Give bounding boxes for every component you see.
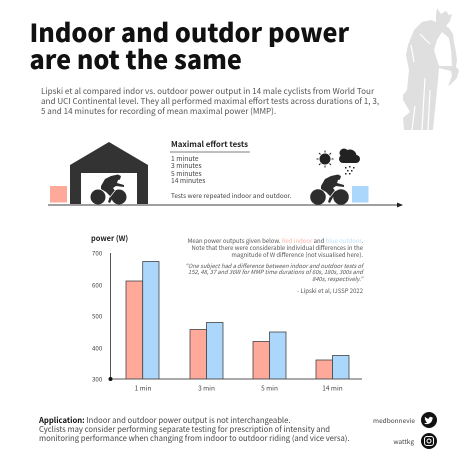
icon: twitter bbox=[421, 412, 437, 428]
chart quote: "One subject had a difference between indoor and outdoor tests of bbox=[185, 260, 363, 270]
outdoor colour square bbox=[352, 186, 368, 202]
title: Indoor and outdor power bbox=[30, 14, 349, 50]
bars: 3 min bbox=[190, 322, 223, 379]
chart axes bbox=[108, 253, 362, 381]
tests list: 3 minutes bbox=[171, 160, 202, 170]
tests list: 14 minutes bbox=[171, 175, 205, 185]
timeline arrow bbox=[48, 202, 403, 208]
tests heading underline bbox=[170, 151, 250, 153]
chart quote bbox=[185, 260, 364, 283]
icon: instagram bbox=[421, 433, 437, 449]
intro text: Lipski et al compared indor vs. outdoor power output in 14 male cyclists from World Tour bbox=[41, 86, 374, 97]
bars: 14 min bbox=[316, 356, 349, 379]
chart note bbox=[188, 236, 363, 259]
chart quote: 152, 48, 37 and 36W for MMP time durations of 60s, 180s, 300s and bbox=[188, 267, 363, 276]
tests heading: Maximal effort tests bbox=[171, 139, 248, 150]
intro text: and UCI Continental level. They all performed maximal effort tests across durations of 1, 3, bbox=[41, 96, 379, 107]
indoor colour square bbox=[50, 186, 67, 202]
chart note: magnitude of W difference (not visualised here). bbox=[231, 250, 363, 259]
y axis labels bbox=[92, 248, 103, 384]
tests list bbox=[171, 153, 206, 185]
icon: storm cloud bbox=[339, 148, 360, 174]
application text bbox=[39, 414, 350, 444]
bars: 1 min bbox=[126, 262, 159, 379]
x axis labels: 1 min bbox=[135, 382, 151, 392]
icon: indoor building bbox=[70, 142, 148, 204]
twitter handle: medbonnevie bbox=[373, 415, 415, 425]
y axis labels: 700 bbox=[92, 248, 103, 258]
tests list: 1 minute bbox=[171, 153, 199, 163]
y axis title: power (W) bbox=[91, 233, 128, 244]
y axis labels: 300 bbox=[92, 374, 103, 384]
application text: monitoring performance when changing from indoor to outdoor riding (and vice versa). bbox=[39, 433, 350, 444]
title bbox=[30, 14, 350, 76]
y axis labels: 500 bbox=[92, 312, 103, 320]
tests note: Tests were repeated indoor and outdoor. bbox=[171, 191, 291, 200]
intro text: 5 and 14 minutes for recording of mean maximal power (MMP). bbox=[41, 106, 276, 117]
x axis labels: 14 min bbox=[322, 382, 343, 392]
chart citation: - Lipski et al, IJSSP 2022 bbox=[297, 286, 363, 295]
x axis labels bbox=[135, 382, 343, 392]
x axis labels: 3 min bbox=[198, 382, 215, 392]
bars: 5 min bbox=[253, 332, 286, 379]
icon: sun bbox=[316, 150, 334, 168]
icon: indoor cyclist bbox=[90, 174, 126, 204]
x axis labels: 5 min bbox=[261, 382, 278, 392]
chart note: Note that there were considerable individual differences in the bbox=[192, 243, 363, 252]
application text: Cyclists may consider performing separate testing for prescription of intensity and bbox=[39, 424, 330, 435]
chart quote: 840s, respectively." bbox=[312, 274, 363, 283]
y axis labels: 400 bbox=[92, 344, 103, 352]
intro text bbox=[41, 86, 379, 117]
chart note: Mean power outputs given below. Red indoor and blue outdoor. bbox=[188, 236, 363, 245]
instagram handle: wattkg bbox=[393, 436, 414, 446]
title: are not the same bbox=[30, 40, 242, 76]
y axis labels: 600 bbox=[92, 280, 103, 290]
application text: Application: Indoor and outdoor power output is not interchangeable. bbox=[39, 414, 290, 426]
icon: outdoor cyclist bbox=[310, 174, 349, 205]
tests list: 5 minutes bbox=[171, 168, 202, 178]
